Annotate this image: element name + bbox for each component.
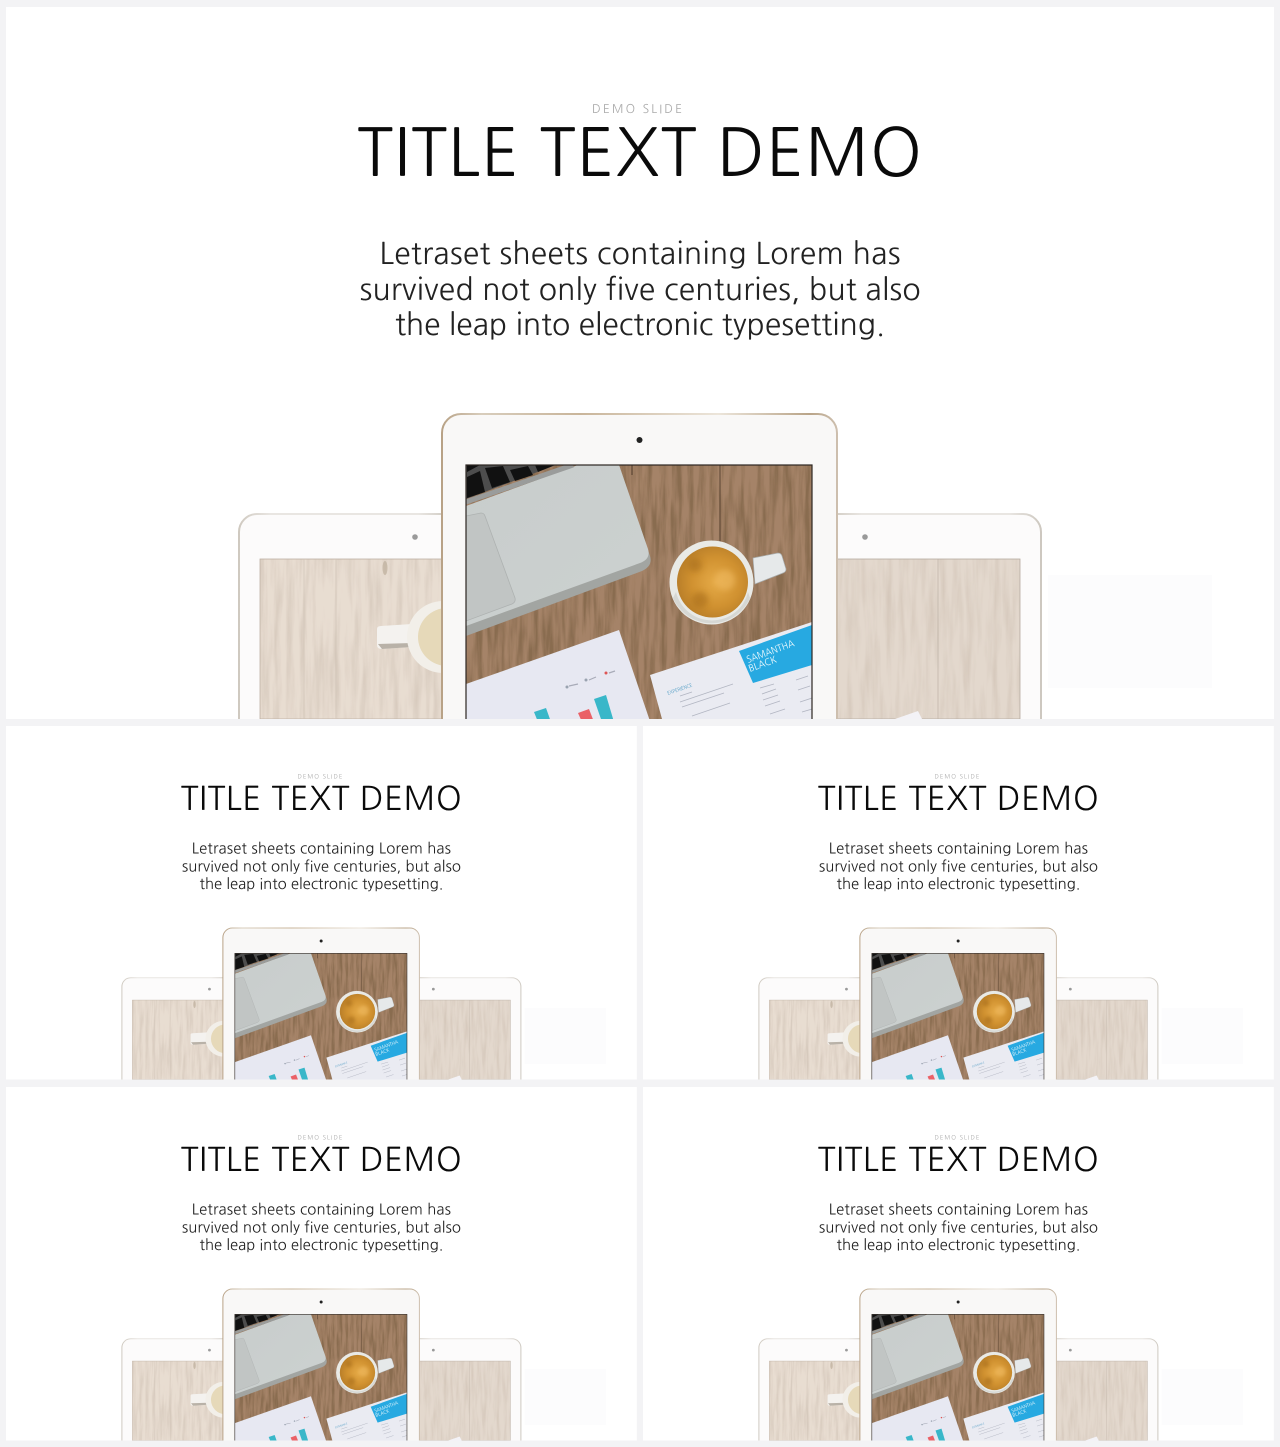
body text: the leap into electronic typesetting. [200,1237,443,1252]
panel: small slide bottom right [643,1087,1274,1446]
body text: ed not only f [439,275,616,305]
title: IT [836,781,862,815]
body text: g Lorem has [728,239,900,269]
body text: the leap into electronic typesetting. [837,876,1080,891]
body text: survived not only five centuries, but also [819,859,1098,874]
body text: Letraset sheets conta [380,239,676,269]
title: LE TEXT DEMO [863,782,1099,815]
title: T [181,782,199,815]
panel: small slide bottom left [6,1087,637,1446]
body text: Letraset sheets containing Lorem has [192,841,451,856]
title: T [181,1143,199,1176]
body text: Letraset sheets containing Lorem has [192,1202,451,1217]
body text: in [832,309,858,340]
body text: survived not only five centuries, but also [182,859,461,874]
body text: in [516,309,541,340]
tablet mockups [122,928,606,1085]
panel: small slide top left [6,726,637,1085]
title: IT [199,1142,225,1176]
body text: Letraset sheets containing Lorem has [829,841,1088,856]
body text: survived not only five centuries, but also [819,1220,1098,1235]
body text [819,841,1098,891]
tablet mockups [122,1289,606,1446]
body text [360,238,920,340]
kicker: demo slide: DEMO SLIDE [298,1135,343,1141]
body text [819,1202,1098,1252]
title: IT [199,781,225,815]
kicker: demo slide: DEMO SLIDE [298,774,343,780]
title: T [357,120,393,186]
body text: iv [417,274,439,305]
body text [182,841,461,891]
kicker: demo slide: DEMO SLIDE [592,103,684,115]
body text: ic [692,309,713,340]
body text: Letraset sheets containing Lorem has [829,1202,1088,1217]
title: IT [394,117,447,186]
body text: iv [617,274,639,305]
body text: e centur [639,275,754,305]
title: LE TEXT DEMO [226,782,462,815]
body text: the leap into electronic typesetting. [200,876,443,891]
title: T [818,1143,836,1176]
body text: surv [360,275,416,305]
title: LE TEXT DEMO [863,1143,1099,1176]
kicker: demo slide: DEMO SLIDE [935,774,980,780]
body text: g. [858,310,885,340]
tablet mockups [239,414,1212,730]
body text: to electron [541,310,691,340]
title: LE TEXT DEMO [448,120,922,186]
body text: the leap into electronic typesetting. [837,1237,1080,1252]
title: LE TEXT DEMO [226,1143,462,1176]
tablet mockups [759,928,1243,1085]
title: IT [836,1142,862,1176]
title: T [818,782,836,815]
kicker: demo slide: DEMO SLIDE [935,1135,980,1141]
body text [182,1202,461,1252]
body text: inin [676,238,728,269]
tablet mockups [759,1289,1243,1446]
body text: ie [754,274,778,305]
body text: the leap [395,310,507,340]
panel: large slide [6,7,1274,730]
body text: s, but also [778,275,920,305]
panel: small slide top right [643,726,1274,1085]
body text: typesett [722,310,832,340]
body text: survived not only five centuries, but also [182,1220,461,1235]
